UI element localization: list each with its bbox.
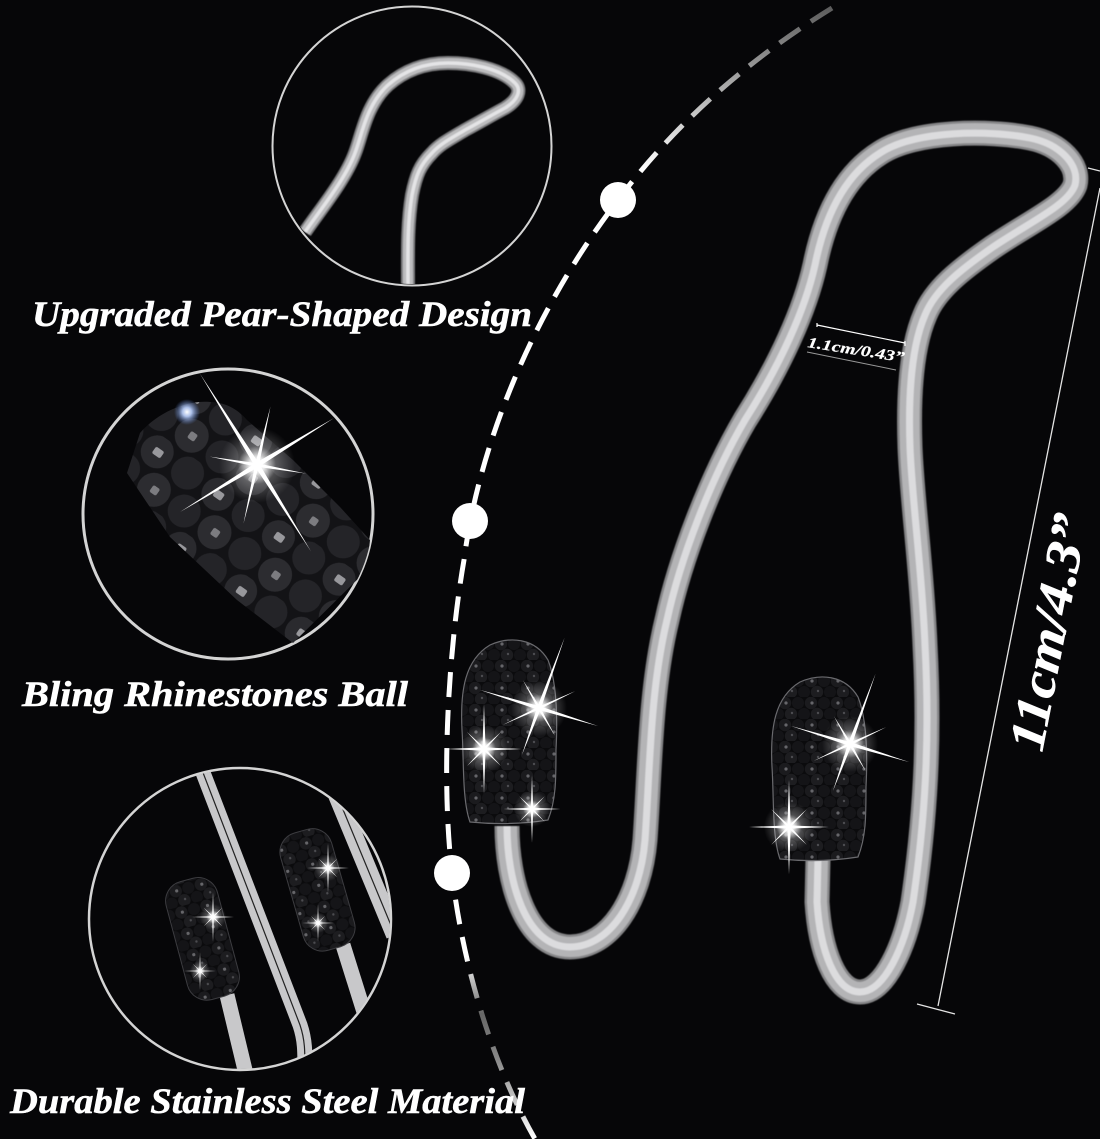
width dimension 1.1cm: [806, 323, 906, 370]
main product: hook wire: [507, 133, 1076, 992]
height dimension label: 11cm/4.3”: [998, 509, 1099, 755]
heading: stainless steel material: Durable Stainless Steel Material: [9, 1081, 525, 1121]
left rhinestone ball: [446, 637, 599, 843]
heading: rhinestones ball: Bling Rhinestones Ball: [21, 674, 408, 714]
width dimension 1.1cm: 1.1cm/0.43”: [806, 335, 906, 366]
height dimension line: [917, 168, 1100, 1014]
panel: rhinestones detail circle: [83, 369, 373, 659]
heading: pear-shaped design: Upgraded Pear-Shaped Design: [32, 294, 532, 334]
panel: stainless steel detail circle: [89, 768, 395, 1075]
dashed timeline arc: [434, 8, 832, 1139]
panel: pear-shaped detail circle: [272, 6, 552, 290]
right rhinestone ball: [749, 673, 910, 874]
